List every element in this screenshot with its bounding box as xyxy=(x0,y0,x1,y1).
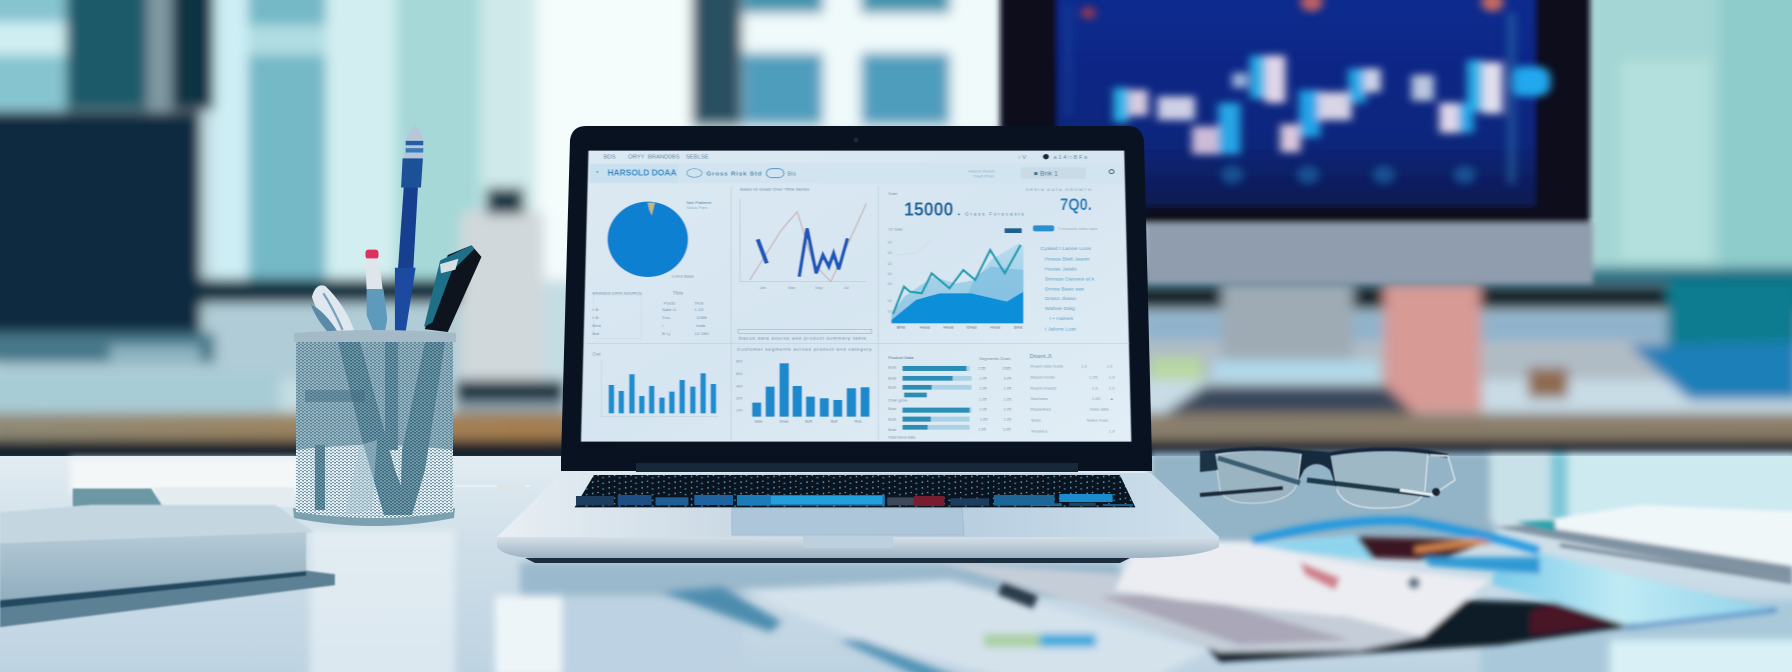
horizontal bar chart xyxy=(888,355,1011,440)
blue band xyxy=(1252,520,1539,551)
mesh upper body xyxy=(296,340,453,452)
small table under pie: Bnd xyxy=(592,323,601,328)
area chart: 10 xyxy=(887,299,892,303)
laptop base xyxy=(497,473,1219,563)
cyan cover under band xyxy=(1252,535,1373,560)
right metric list: Smiss Baso sas xyxy=(1045,287,1085,292)
area chart: 10 xyxy=(887,282,892,286)
area chart: Ones xyxy=(966,325,977,330)
cup base xyxy=(293,508,455,526)
right metric list xyxy=(1033,225,1098,332)
bottom-right table: Data data xyxy=(1090,407,1109,412)
bottom-right table xyxy=(1030,354,1116,433)
magazine underside shadow xyxy=(1200,600,1640,662)
header bar: Gross Risk Std xyxy=(706,171,762,177)
horizontal bar chart: Segments Grain xyxy=(979,356,1010,361)
header bar: Wsent Rowd xyxy=(968,169,995,174)
area chart: 10 xyxy=(887,272,892,276)
horizontal bar chart: Bost xyxy=(888,407,896,411)
area chart xyxy=(887,227,1023,330)
scissors xyxy=(311,285,354,333)
area chart: Bhis xyxy=(897,325,905,330)
line chart xyxy=(738,187,872,340)
horizontal bar chart: Bost xyxy=(888,428,896,432)
bottom-right table: 1.05 xyxy=(1089,375,1098,380)
bottom-right table: Bisant Hosts xyxy=(1031,375,1055,380)
small table under pie: B Lj xyxy=(662,331,670,336)
line chart: Sales vs Goals Over Time Series xyxy=(740,187,810,192)
mesh pen holder xyxy=(293,330,456,526)
pie chart xyxy=(607,200,712,279)
bottom-right table: 1.0 xyxy=(1081,364,1088,369)
top menu: ‹ V xyxy=(1019,155,1027,161)
area chart: 10 xyxy=(887,262,892,266)
window: left centre xyxy=(214,0,536,280)
lower-middle bar chart: Boll xyxy=(831,420,838,424)
right metric list: Hosea Blalt Jaaon xyxy=(1045,257,1090,262)
header bar: • xyxy=(596,170,599,175)
small table under pie: Pocts xyxy=(664,301,676,306)
pens in holder xyxy=(311,124,481,333)
horizontal bar chart: Bost xyxy=(888,377,896,380)
small table under pie: Tbls xyxy=(673,291,684,296)
top menu: SEBLSE xyxy=(686,155,709,160)
magazine side pages xyxy=(940,562,1423,652)
monitor chin xyxy=(1145,223,1593,284)
big number 15000: 15000 xyxy=(904,199,953,220)
right metric list: I • Halnes xyxy=(1050,316,1074,322)
bridge and hinges xyxy=(1298,452,1337,490)
right lens xyxy=(1330,450,1428,508)
area chart: 10 xyxy=(887,310,892,314)
lower-left bar chart xyxy=(592,352,718,417)
monitor candlestick chart xyxy=(1066,0,1550,184)
area chart: Hoos xyxy=(990,325,1000,330)
bottom-right table: 1.0 xyxy=(1109,375,1116,380)
top menu xyxy=(603,155,1088,161)
line chart: Jul xyxy=(844,286,849,290)
horizontal bar chart: 1.65 xyxy=(980,418,988,422)
shelf band and dark strip xyxy=(200,279,540,303)
header bar: Bis xyxy=(787,172,796,177)
frame top xyxy=(1200,449,1448,456)
bright window section xyxy=(536,0,692,280)
horizontal bar chart: 1.05 xyxy=(979,398,987,402)
right metric list: Smrass Oaooes el.k xyxy=(1045,277,1095,282)
right metric list: Huose Jalalo xyxy=(1045,267,1077,272)
lower blue tab xyxy=(1423,557,1540,574)
lower-middle bar chart: 800 xyxy=(736,360,743,363)
right metric list: Graso Jbaso xyxy=(1045,296,1076,302)
bottom-right table: Sales hoas xyxy=(1087,418,1108,423)
laptop screen dashboard xyxy=(581,151,1131,442)
pens seen through mesh xyxy=(305,342,445,515)
pie chart: Salus Pars xyxy=(687,205,708,210)
dark red inset with orange stripe xyxy=(1356,537,1490,560)
area chart: 10 xyxy=(887,241,892,244)
cup rim xyxy=(294,330,456,342)
pie chart: Lmnd Base xyxy=(672,274,695,279)
area chart: Sms xyxy=(1014,325,1023,330)
bottom-right table: Base xyxy=(1031,418,1042,423)
lower-middle bar chart: Sale xyxy=(755,420,762,424)
laptop xyxy=(497,126,1219,563)
horizontal bar chart: 1.05 xyxy=(1004,418,1011,422)
bottom-right table: 1.0 xyxy=(1109,386,1116,390)
right metric list: Forecasts stats data xyxy=(1058,226,1098,231)
top menu: BDS xyxy=(603,155,616,160)
bottle xyxy=(460,188,544,382)
big number 7Q0 xyxy=(1026,187,1092,214)
horizontal bar chart: Chan grow xyxy=(888,399,908,402)
header bar xyxy=(588,163,1124,183)
horizontal bar chart: Bost xyxy=(888,386,896,390)
horizontal bar chart: 2.55 xyxy=(978,367,986,370)
small table under pie: 12 050 xyxy=(694,331,710,336)
bottom-right table: Rasanines xyxy=(1031,407,1051,412)
horizontal bar chart: 1.05 xyxy=(979,387,987,390)
lower-middle bar chart: Bott xyxy=(805,420,812,424)
lower-middle bar chart: 600 xyxy=(736,372,743,376)
magazine right page xyxy=(1493,553,1776,625)
trackpad xyxy=(732,508,964,535)
small table under pie: ▪ B xyxy=(592,307,599,312)
small table under pie: Tiral xyxy=(694,301,703,306)
horizontal bar chart: 3.05 xyxy=(1004,377,1011,380)
horizontal bar chart: Total trend data xyxy=(888,436,916,440)
camera xyxy=(854,138,858,142)
right metric list: Cyaled I Lanoe Loos xyxy=(1040,246,1092,252)
background desk items: stand, pink object, cup, boxes xyxy=(1150,280,1792,413)
small table under pie: Tun xyxy=(662,315,671,320)
magazine left page xyxy=(1115,540,1489,637)
lower-middle bar chart: 200 xyxy=(736,397,743,400)
keyboard xyxy=(575,475,1135,507)
small table under pie xyxy=(592,291,710,338)
small table under pie: ▪ B xyxy=(592,315,599,320)
left monitor xyxy=(0,111,215,394)
bottom-right table: ▲ xyxy=(1110,396,1114,401)
big number 7Q0: 7Q0. xyxy=(1060,194,1092,214)
horizontal bar chart: Bost xyxy=(888,418,896,422)
small table under pie: 1055 xyxy=(696,315,708,320)
lower-middle bar chart: Rus xyxy=(855,420,862,424)
horizontal bar chart: 1.05 xyxy=(979,377,987,380)
horizontal bar chart: 1.05 xyxy=(1004,408,1011,412)
area chart: 10 Sale xyxy=(888,227,904,232)
monitor bezel xyxy=(1000,0,1590,223)
temple arms seen through lenses xyxy=(1200,458,1435,495)
lower-middle bar chart xyxy=(736,347,872,424)
top menu: ORYY xyxy=(628,155,645,160)
big number 15000: ● Grass Forecasts xyxy=(957,212,1024,217)
header bar: Dadt Pnlo xyxy=(973,174,995,179)
bottom-right table: Roant data hosts xyxy=(1031,364,1063,369)
USB cable xyxy=(455,484,530,489)
lower-middle bar chart: Customer segments across product and category xyxy=(737,347,872,352)
line chart: May xyxy=(815,286,823,290)
bottom-right table: Doant.Jl. xyxy=(1030,354,1054,360)
bottom-right table: 1.0 xyxy=(1106,364,1113,369)
lower-left bar chart: Oat xyxy=(592,352,601,357)
horizontal bar chart: 1.05 xyxy=(979,408,987,412)
bottom-right table: 1.0 xyxy=(1109,429,1116,433)
line chart: Jan xyxy=(760,286,766,290)
dark window column xyxy=(66,0,214,110)
small table under pie: Inds xyxy=(696,323,706,328)
header bar: HARSOLD DOAA xyxy=(607,168,677,177)
bottom-right table: 1.0 xyxy=(1092,386,1099,390)
front edge xyxy=(497,537,1219,558)
pie chart: Net Patiend xyxy=(687,200,712,205)
open magazine xyxy=(940,520,1776,662)
small table under pie: 1.02 xyxy=(694,307,704,312)
lower-middle bar chart: 100 xyxy=(736,409,743,413)
small table under pie: BRANDS DATA SOURCE xyxy=(592,291,643,295)
colour swatch on paper xyxy=(984,634,1096,647)
tablet or notebook, right xyxy=(1493,505,1792,582)
glasses xyxy=(1200,449,1455,508)
horizontal bar chart: Bost xyxy=(888,366,896,370)
big number 15000: Sale xyxy=(888,191,898,196)
small table under pie: I xyxy=(662,323,663,328)
horizontal bar chart: 1.05 xyxy=(1004,387,1011,390)
bottom-right table: Rsant.Hoasts xyxy=(1031,386,1057,390)
white desk surface xyxy=(0,452,1792,672)
bottom-right table: Sanhoes xyxy=(1031,396,1048,401)
area chart: Hoos xyxy=(944,325,954,330)
blurred background office xyxy=(0,0,1792,464)
header bar: ■ Bnk 1 xyxy=(1034,171,1059,177)
eraser pencil xyxy=(365,250,387,333)
dark marker and clip xyxy=(424,245,481,332)
lower-middle bar chart: Soao xyxy=(779,420,789,424)
left lens xyxy=(1215,450,1301,503)
background monitor xyxy=(1000,0,1593,284)
right metric list: I Jalons Lust xyxy=(1045,327,1076,332)
right metric list: Wahoe Dalg xyxy=(1045,306,1075,312)
loose paper and pen in the foreground xyxy=(662,580,1210,672)
area chart: 10 xyxy=(887,251,892,255)
lower-middle bar chart: 400 xyxy=(736,385,743,388)
big number 15000 xyxy=(888,191,1024,220)
mesh lower bright body xyxy=(296,445,453,518)
wood desk edge xyxy=(0,413,1792,440)
small table under pie: Sale U xyxy=(662,307,676,312)
window: far left xyxy=(0,0,66,110)
top menu: BRAND0BS xyxy=(648,155,680,160)
horizontal bar chart: 1035 xyxy=(1002,367,1011,370)
horizontal bar chart: 1.05 xyxy=(1004,398,1011,402)
top menu: a 1 4 □ B F ≡ xyxy=(1053,155,1088,161)
area chart: Hoos xyxy=(920,325,930,330)
stacked books, left xyxy=(0,487,335,627)
window: right xyxy=(1590,0,1792,270)
panel dividers xyxy=(587,187,1129,440)
horizontal bar chart: Product Data xyxy=(888,355,914,360)
horizontal bar chart: 1.05 xyxy=(978,428,986,432)
bottom-right table: Rmant.e xyxy=(1031,429,1049,433)
line chart: Mar xyxy=(789,286,796,290)
small table under pie: Bal xyxy=(592,331,599,336)
blue pen xyxy=(395,124,423,332)
line chart: Dacus data source and product summary table xyxy=(739,336,867,340)
bottom-right table: 1.05 xyxy=(1092,396,1101,401)
horizontal bar chart: 1.05 xyxy=(1003,428,1011,432)
screen surface xyxy=(581,151,1131,442)
big number 7Q0: SRSIN DATA GROWTH xyxy=(1026,187,1091,192)
laptop lid xyxy=(561,126,1152,471)
monitor screen xyxy=(1057,0,1535,206)
